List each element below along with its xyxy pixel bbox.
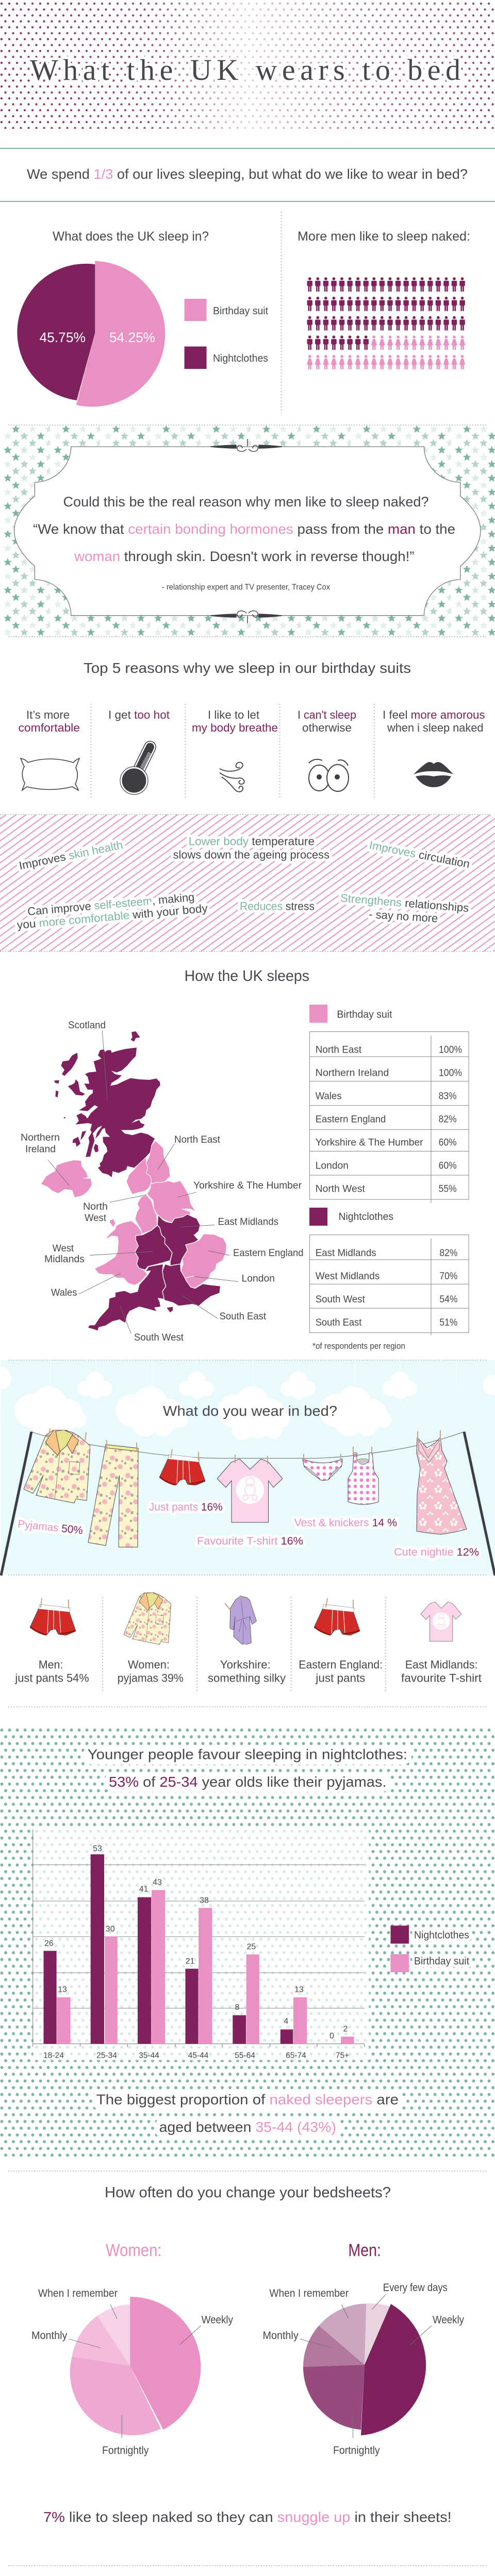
bar chart [33,1829,369,2060]
bar chart: 75+ [336,2052,349,2060]
map labels: Yorkshire & The Humber [193,1180,302,1191]
heading: women: Women: [106,2241,162,2260]
reason 1: comfortable [19,708,80,790]
clouds [0,1360,495,1440]
heading: bedsheets: How often do you change your bedsheets? [105,2184,391,2201]
ornate frame [14,447,481,616]
statement: snuggle up: 7% like to sleep naked so they can snuggle up in their sheets! [43,2509,452,2525]
clothing: vest [348,1447,378,1504]
legend: nightclothes: Nightclothes [338,1211,393,1223]
benefit: relationships: - say no more [369,908,438,925]
bar chart: 25 [247,1942,256,1952]
label: favourite t-shirt: Favourite T-shirt 16% [197,1535,303,1547]
pie leaders and labels: Fortnightly [102,2445,149,2456]
bar chart: 65-74 [286,2052,306,2060]
reason 2: too hot [108,708,170,794]
heading: men: Men: [348,2241,381,2260]
map labels: North East [174,1134,221,1145]
clothing: pyjama top [24,1428,90,1503]
table: birthday suit regions: London [316,1160,349,1172]
header: dotted banner [0,0,495,129]
map labels: Northern [21,1132,60,1143]
pie leaders and labels: Weekly [433,2314,464,2326]
region: Northern Ireland [41,1160,92,1197]
reason 4: can't sleep: I can't sleep [298,708,356,721]
quote text: Could this be the real reason why men like to sleep naked? [63,494,429,510]
table: nightclothes regions: 51% [439,1317,457,1328]
bar chart: 8 [235,2003,240,2012]
favourite: men [14,1598,89,1685]
pie chart: 45.75% [39,330,86,345]
bar chart: 45-44 [188,2052,209,2060]
table: birthday suit regions: Yorkshire & The Humber [316,1137,423,1148]
map labels: Midlands [44,1253,85,1265]
table: birthday suit regions: 100% [439,1044,462,1056]
benefit: skin health: Improves skin health [18,838,124,872]
icon: wind swirls [220,762,244,792]
table: birthday suit regions: Northern Ireland [316,1067,389,1079]
table: birthday suit regions: North West [316,1183,365,1194]
pie leaders and labels: Monthly [31,2330,68,2342]
reason 2: too hot: I get too hot [108,708,170,721]
favourite: women: Women: [128,1658,170,1671]
map of the UK [21,1020,303,1343]
map labels: Wales [51,1287,77,1298]
reason 5: more amorous: when i sleep naked [387,721,484,734]
benefit: body temperature: slows down the ageing process [173,849,329,861]
icon: pillow [21,758,79,790]
favourite: Yorkshire: something silky [208,1671,286,1685]
map labels: Ireland [25,1144,56,1155]
pie leaders and labels [31,2287,233,2456]
intro statement: We spend 1/3 of our lives sleeping, but what do we like to wear in bed? [27,166,468,182]
label: pyjamas: Pyjamas 50% [17,1518,84,1537]
reason 5: more amorous [383,708,485,787]
map labels: West [53,1243,74,1254]
benefit: self-esteem: Can improve self-esteem, making [27,890,195,918]
benefit: stress: Reduces stress [240,900,315,913]
regions: England and Wales [88,1181,226,1331]
pie leaders and labels [263,2282,464,2456]
poles and line [1,1432,495,1575]
panel: quote on star background [0,425,495,637]
heading: top 5 reasons: Top 5 reasons why we sleep in our birthday suits [84,660,411,676]
label: just pants: Just pants 16% [149,1501,223,1513]
legend: birthday suit: Birthday suit [337,1009,392,1021]
bar chart: 41 [139,1885,148,1894]
bar chart: 55-64 [235,2052,255,2060]
table: birthday suit regions [309,1031,469,1203]
map labels: Eastern England [233,1247,303,1259]
map labels [21,1020,303,1343]
pie leaders and labels: When I remember [38,2287,118,2299]
heading: younger people [84,1745,411,1792]
legend: nightclothes [309,1208,393,1226]
quote text [33,494,455,564]
panel: washing line [0,1360,495,1575]
bar chart: 43 [153,1878,162,1887]
table: birthday suit regions: 55% [439,1183,457,1194]
map labels: West [85,1212,107,1224]
clothing: nightie [417,1430,467,1534]
benefit: self-esteem: you more comfortable with your body [16,902,208,931]
panel: more men sleep naked [298,229,470,374]
clothing: knickers [303,1454,342,1481]
bar chart: 13 [58,1986,67,1994]
favourite: East Midlands: favourite T-shirt [401,1671,482,1685]
ornament bottom [210,611,282,623]
reason 4: can't sleep: otherwise [302,721,352,734]
table: nightclothes regions: 70% [439,1270,457,1282]
clothing: t-shirt [217,1454,283,1522]
table: birthday suit regions: North East [316,1044,362,1056]
panel: benefits on striped background [0,815,495,952]
title: What the UK wears to bed [30,53,460,87]
favourite: men: Men: [39,1658,63,1671]
bar chart: 21 [186,1957,195,1966]
bar chart: 26 [44,1939,54,1948]
label: cute nightie: Cute nightie 12% [394,1547,479,1558]
favourite: women: pyjamas 39% [118,1671,184,1685]
heading: What do you wear in bed? [163,1403,337,1419]
statement: naked sleepers [92,2090,403,2138]
panel: what does the UK sleep in [17,229,268,406]
favourite: Eastern England: Eastern England: [299,1658,383,1671]
favourite: Eastern England [299,1598,383,1685]
reason 3: body breathe: I like to let [208,708,259,721]
bar chart: 53 [93,1844,102,1853]
heading: More men like to sleep naked: [298,229,470,244]
bar chart: 38 [200,1896,209,1905]
bar chart: 4 [284,2017,288,2026]
favourite: Yorkshire: Yorkshire: [220,1658,271,1671]
icon: thermometer [120,747,150,794]
label: vest and knickers: Vest & knickers 14 % [294,1517,397,1529]
table: birthday suit regions: Wales [316,1091,342,1102]
benefit: body temperature [173,835,329,861]
table: nightclothes regions: 54% [439,1294,457,1305]
reason 4: can't sleep [298,708,356,791]
statement: naked sleepers: The biggest proportion of naked sleepers are [96,2092,399,2107]
map labels: London [241,1273,275,1284]
pie leaders and labels: Monthly [263,2330,299,2342]
table: birthday suit regions: 60% [439,1160,457,1172]
table: birthday suit regions: 60% [439,1137,457,1148]
favourite: East Midlands [401,1602,482,1685]
map labels: Scotland [68,1020,106,1031]
heading: What does the UK sleep in? [53,229,209,244]
clothing: pyjama bottoms [88,1440,138,1547]
heading: younger people: 53% of 25-34 year olds like their pyjamas. [109,1774,387,1790]
table: nightclothes regions: 82% [439,1247,457,1259]
pie chart: women [70,2297,201,2435]
benefit: body temperature: Lower body temperature [189,835,315,848]
legend: birthday suit [309,1005,392,1023]
statement: naked sleepers: aged between 35-44 (43%) [159,2119,336,2135]
ornament top [210,439,282,451]
heading: younger people: Younger people favour sleeping in nightclothes: [88,1747,407,1762]
favourite: East Midlands: East Midlands: [405,1658,477,1671]
legend [185,299,268,369]
pie leaders and labels: Fortnightly [333,2445,380,2456]
leader lines [48,1031,238,1333]
panel: men bedsheets pie [263,2241,464,2456]
footnote: *of respondents per region [312,1342,405,1351]
benefit: relationships [340,891,469,925]
panel: women bedsheets pie [31,2241,233,2456]
pictogram of people [307,277,467,374]
table: birthday suit regions: 82% [439,1114,457,1125]
bar chart: 25-34 [96,2052,117,2060]
clothing: boxers [159,1449,205,1485]
benefit: circulation: Improves circulation [368,838,471,871]
favourite: men: just pants 54% [14,1671,89,1685]
bar chart: 18-24 [43,2052,64,2060]
icon: eyes [309,759,349,791]
pie leaders and labels: Every few days [383,2282,448,2294]
region: northern England [126,1141,170,1194]
bar chart: 35-44 [139,2052,159,2060]
table: nightclothes regions: South East [316,1317,362,1328]
region: Scotland [54,1031,160,1177]
pie leaders and labels: When I remember [269,2287,349,2299]
map labels: East Midlands [218,1216,278,1228]
table: nightclothes regions [309,1235,469,1335]
pie chart: men [303,2303,426,2435]
chart legend [391,1926,469,1972]
table: nightclothes regions: East Midlands [316,1247,376,1259]
chart legend: Nightclothes [414,1929,469,1941]
bar chart: 30 [106,1925,115,1934]
quote text: woman through skin. Doesn't work in reverse though!” [74,549,414,564]
reason 1: comfortable: It’s more [26,708,70,721]
favourite: Yorkshire [208,1595,286,1685]
table: birthday suit regions: Eastern England [316,1114,386,1125]
map labels: South West [134,1332,184,1343]
icon: lips [414,762,453,787]
pie chart [17,261,165,406]
pie leaders and labels: Weekly [202,2314,233,2326]
panel: age groups on dotted background [0,1728,495,2160]
map labels: North [83,1201,108,1212]
reason 3: body breathe: my body breathe [192,721,278,734]
map labels: South East [220,1311,267,1322]
chart legend: Birthday suit [414,1956,469,1967]
bar chart: 0 [329,2032,334,2041]
reason 5: more amorous: I feel more amorous [383,708,485,721]
heading: how the UK sleeps: How the UK sleeps [185,968,309,985]
bar chart: 2 [343,2025,348,2033]
table: nightclothes regions: West Midlands [316,1270,380,1282]
table: birthday suit regions: 100% [439,1067,462,1079]
favourite: Eastern England: just pants [315,1671,365,1685]
legend: Birthday suit [213,306,268,317]
table: nightclothes regions: South West [316,1294,365,1305]
reason 1: comfortable: comfortable [19,721,80,734]
attribution: - relationship expert and TV presenter, Tracey Cox [162,583,330,591]
benefit: relationships: Strengthens relationships [340,891,469,914]
favourite: women [118,1592,184,1685]
table: birthday suit regions: 83% [439,1091,457,1102]
quote text: “We know that certain bonding hormones pass from the man to the [33,521,455,537]
legend: Nightclothes [213,353,268,364]
reason 3: body breathe [192,708,278,792]
pie chart: 54.25% [109,330,155,345]
bar chart: 13 [294,1986,304,1994]
